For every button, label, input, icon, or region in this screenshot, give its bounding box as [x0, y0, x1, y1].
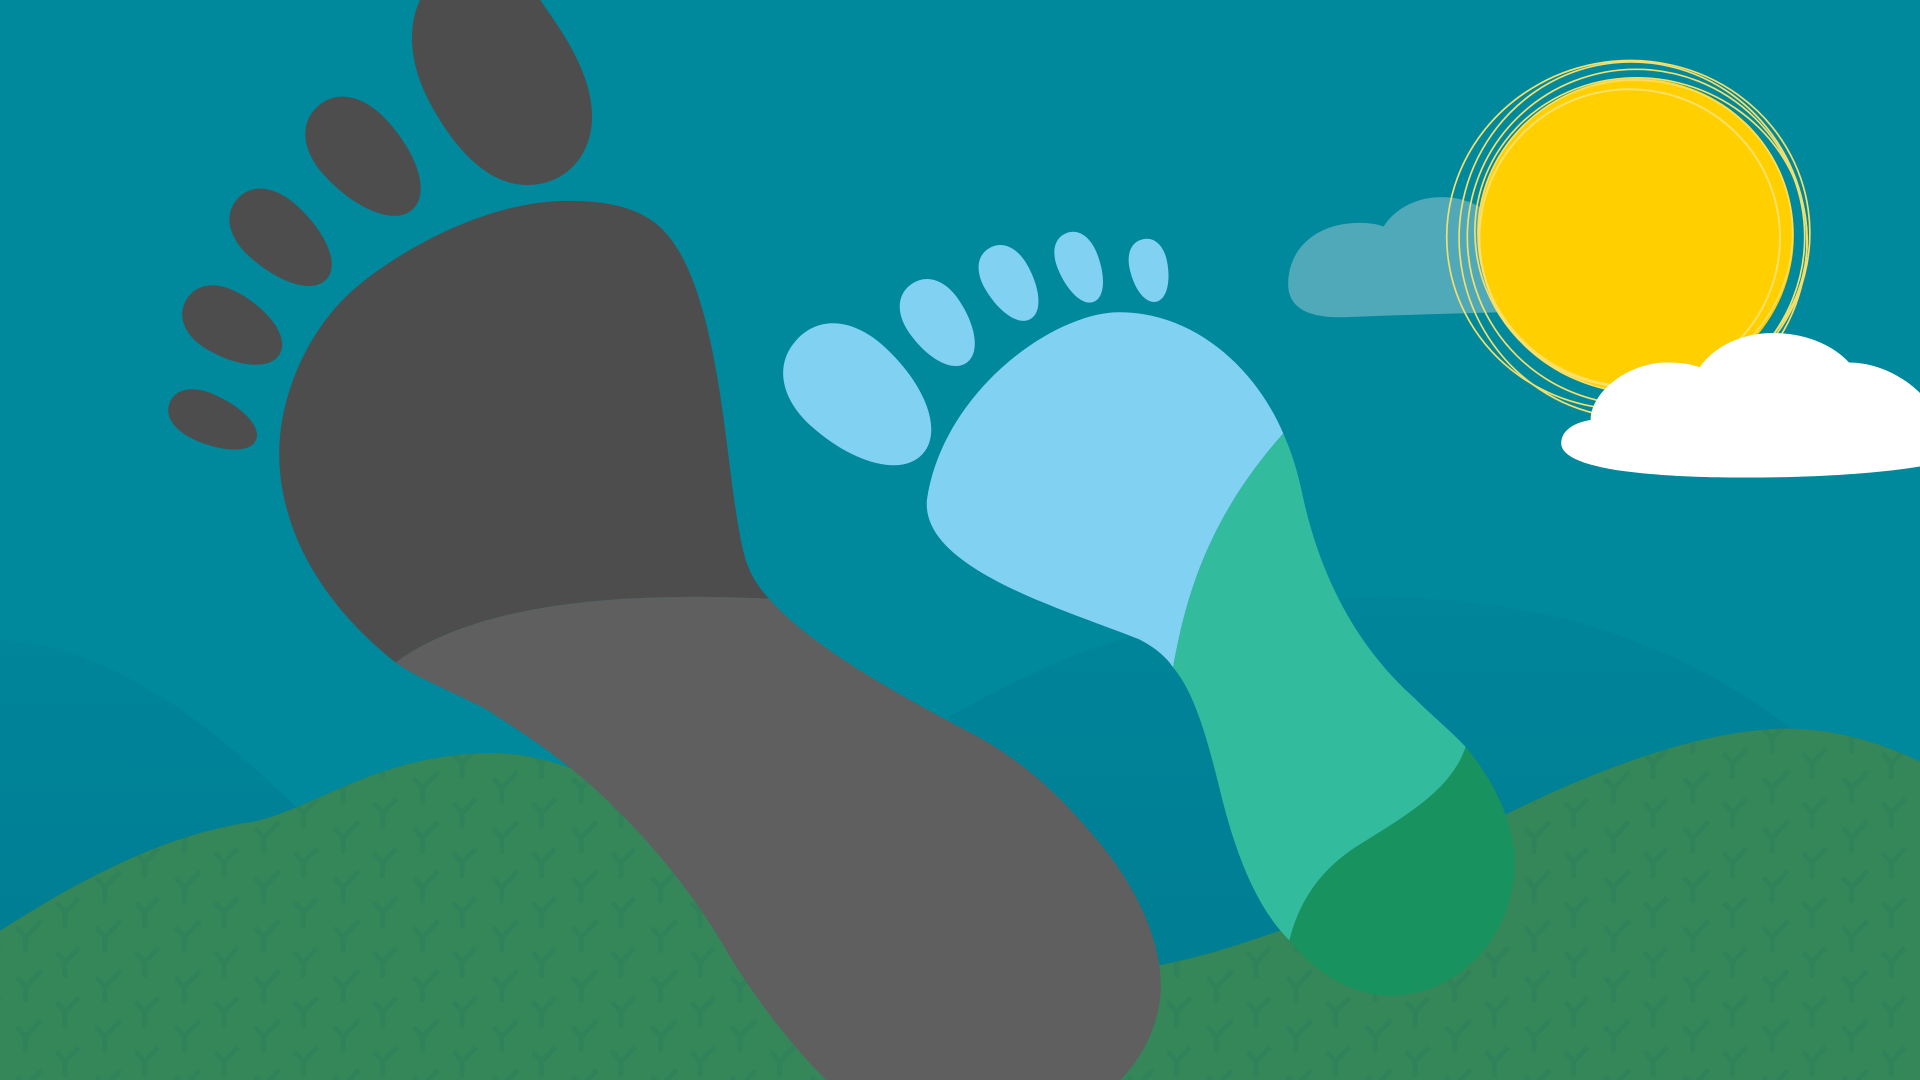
big foot: toes — [160, 0, 592, 463]
small colourful footprint — [760, 225, 1515, 996]
small foot: green heel — [1289, 747, 1515, 996]
faint cloud behind sun — [1288, 197, 1500, 317]
big foot: toe 1 — [412, 0, 592, 185]
back hill: left — [0, 640, 300, 980]
big foot: toe 2 — [287, 78, 443, 238]
sun with sketched rings — [1424, 29, 1841, 451]
small foot: toe 1 — [760, 300, 959, 494]
big foot: toe 3 — [214, 173, 350, 305]
small foot: toe 2 — [887, 267, 991, 380]
big foot: toe 5 — [160, 379, 266, 463]
big foot: lower sole — [396, 597, 1161, 1080]
small foot: blue forefoot — [927, 312, 1283, 667]
big foot: toe 4 — [170, 272, 296, 382]
white cloud — [1561, 333, 1920, 478]
foreground hill with grass pattern — [0, 729, 1920, 1080]
large dark footprint — [160, 0, 1161, 1080]
small foot: toe 3 — [969, 236, 1051, 331]
big foot: upper sole — [279, 201, 769, 662]
small foot: toe 5 — [1124, 235, 1175, 306]
small foot: toes — [760, 225, 1175, 494]
back hill: centre and right — [949, 598, 1794, 1004]
small foot: toe 4 — [1047, 225, 1113, 310]
sun rings — [1424, 29, 1841, 451]
small foot: teal midfoot — [1173, 433, 1466, 940]
sun disc — [1478, 78, 1794, 392]
